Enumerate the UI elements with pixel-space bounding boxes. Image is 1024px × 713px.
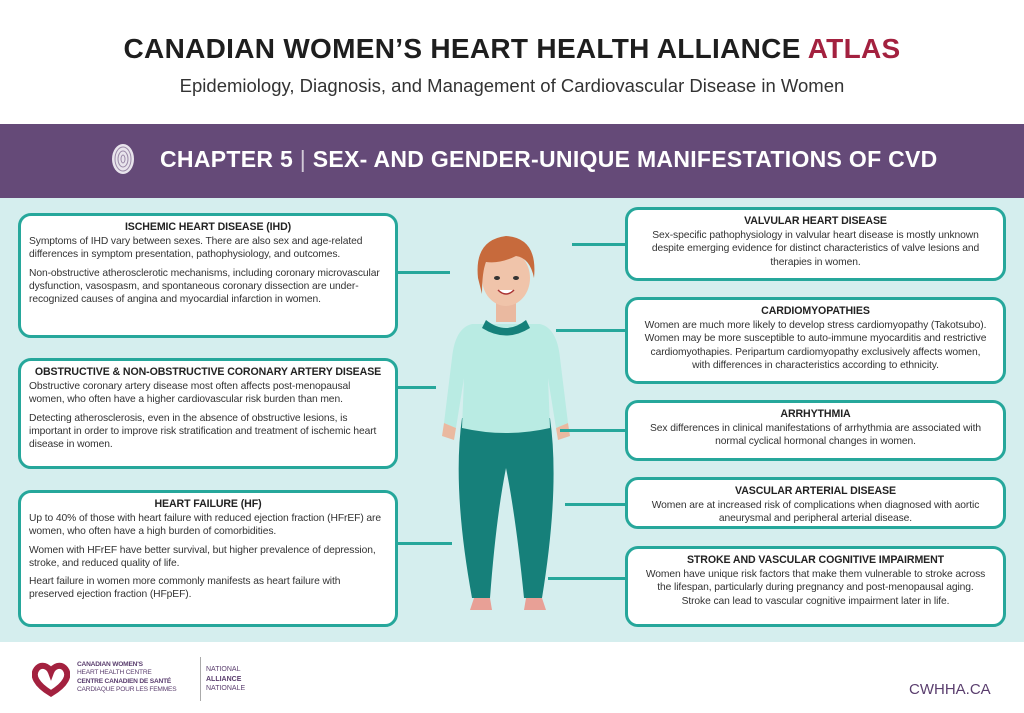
panel: heart failure: HEART FAILURE (HF) bbox=[154, 498, 262, 510]
panel: ischemic heart disease: Symptoms of IHD vary between sexes. There are also sex and age-related differences in symptom presentation, pathophysiology, and outcomes. bbox=[29, 236, 362, 260]
icon: fingerprint bbox=[112, 144, 134, 174]
footer url: CWHHA.CA bbox=[909, 681, 991, 698]
panel: ischemic heart disease bbox=[18, 213, 398, 338]
panel: vascular arterial disease: VASCULAR ARTERIAL DISEASE bbox=[735, 485, 896, 497]
footer logo: CARDIAQUE POUR LES FEMMES bbox=[77, 686, 176, 693]
connector: vascular bbox=[565, 503, 625, 506]
panel: heart failure: Up to 40% of those with heart failure with reduced ejection fraction (HFrEF) are women, who often have a high burden of comorbidities. bbox=[29, 513, 381, 537]
panel: valvular heart disease bbox=[625, 207, 1006, 281]
figure: woman illustration bbox=[442, 236, 570, 610]
banner heading: CHAPTER 5 | SEX- AND GENDER-UNIQUE MANIFESTATIONS OF CVD bbox=[160, 146, 938, 172]
panel: ischemic heart disease: Non-obstructive atherosclerotic mechanisms, including coronary microvascular dysfunction, vasospasm, and spontaneous coronary dissection are under-recognized causes of angina and myocardial infarction in women. bbox=[29, 268, 380, 305]
panel: heart failure: Heart failure in women more commonly manifests as heart failure with preserved ejection fraction (HFpEF). bbox=[29, 576, 340, 600]
panel: obstructive and non-obstructive CAD: OBSTRUCTIVE & NON-OBSTRUCTIVE CORONARY ARTERY DISEASE bbox=[35, 366, 381, 378]
panel: arrhythmia bbox=[625, 400, 1006, 461]
footer logo bbox=[32, 657, 245, 701]
panel: vascular arterial disease: Women are at increased risk of complications when diagnosed with aortic aneurysmal and peripheral arterial disease. bbox=[652, 500, 979, 524]
connector: cardiomyopathies bbox=[556, 329, 625, 332]
panel: obstructive and non-obstructive CAD: Obstructive coronary artery disease most often affects post-menopausal women, who often have a higher cardiovascular risk burden than men. bbox=[29, 381, 350, 405]
footer logo: CANADIAN WOMEN'S bbox=[77, 661, 143, 668]
connector: HF bbox=[398, 542, 452, 545]
connector: valvular bbox=[572, 243, 625, 246]
chapter banner bbox=[0, 124, 1024, 198]
panel: ischemic heart disease: ISCHEMIC HEART DISEASE (IHD) bbox=[125, 221, 291, 233]
panel: heart failure bbox=[18, 490, 398, 627]
title: CANADIAN WOMEN’S HEART HEALTH ALLIANCE ATLAS bbox=[124, 33, 900, 64]
panel: valvular heart disease: Sex-specific pathophysiology in valvular heart disease is mostly unknown despite emerging evidence for distinct characteristics of valve lesions and therapies in women. bbox=[652, 230, 979, 268]
panel: stroke and vascular cognitive impairment: STROKE AND VASCULAR COGNITIVE IMPAIRMENT bbox=[687, 554, 944, 566]
panel: cardiomyopathies: Women are much more likely to develop stress cardiomyopathy (Takotsubo). Women may be more susceptible to auto-immune myocarditis and restrictive cardiomyothapies. Peripartum cardiomyopathy exclusively affects women, with differences in characteristics according to ethnicity. bbox=[645, 320, 986, 371]
panel: cardiomyopathies bbox=[625, 297, 1006, 384]
panel: stroke and vascular cognitive impairment: Women have unique risk factors that make them vulnerable to stroke across the lifespan, particularly during pregnancy and post-menopausal aging. Stroke can lead to vascular cognitive impairment later in life. bbox=[646, 569, 985, 607]
panel: vascular arterial disease bbox=[625, 477, 1006, 529]
footer logo: ALLIANCE bbox=[206, 676, 241, 682]
panel: cardiomyopathies: CARDIOMYOPATHIES bbox=[761, 305, 870, 317]
footer logo: NATIONALE bbox=[206, 685, 245, 692]
panel: arrhythmia: ARRHYTHMIA bbox=[780, 408, 851, 420]
footer logo: CENTRE CANADIEN DE SANTÉ bbox=[77, 678, 171, 685]
panel: obstructive and non-obstructive CAD bbox=[18, 358, 398, 469]
icon: heart logo bbox=[32, 662, 70, 697]
panel: valvular heart disease: VALVULAR HEART DISEASE bbox=[744, 215, 887, 227]
connector: CAD bbox=[398, 386, 436, 389]
panel: obstructive and non-obstructive CAD: Detecting atherosclerosis, even in the absence of obstructive lesions, is important in order to improve risk stratification and treatment of ischemic heart disease in women. bbox=[29, 413, 376, 450]
footer logo: HEART HEALTH CENTRE bbox=[77, 669, 152, 676]
connector: stroke bbox=[548, 577, 625, 580]
connector: arrhythmia bbox=[560, 429, 625, 432]
subtitle: Epidemiology, Diagnosis, and Management of Cardiovascular Disease in Women bbox=[180, 75, 844, 96]
panel: heart failure: Women with HFrEF have better survival, but higher prevalence of depression, stroke, and reduced quality of life. bbox=[29, 545, 376, 569]
connector: IHD bbox=[398, 271, 450, 274]
panel: arrhythmia: Sex differences in clinical manifestations of arrhythmia are associated with normal cyclical hormonal changes in women. bbox=[650, 423, 981, 447]
panel: stroke and vascular cognitive impairment bbox=[625, 546, 1006, 627]
footer logo: NATIONAL bbox=[206, 666, 240, 673]
